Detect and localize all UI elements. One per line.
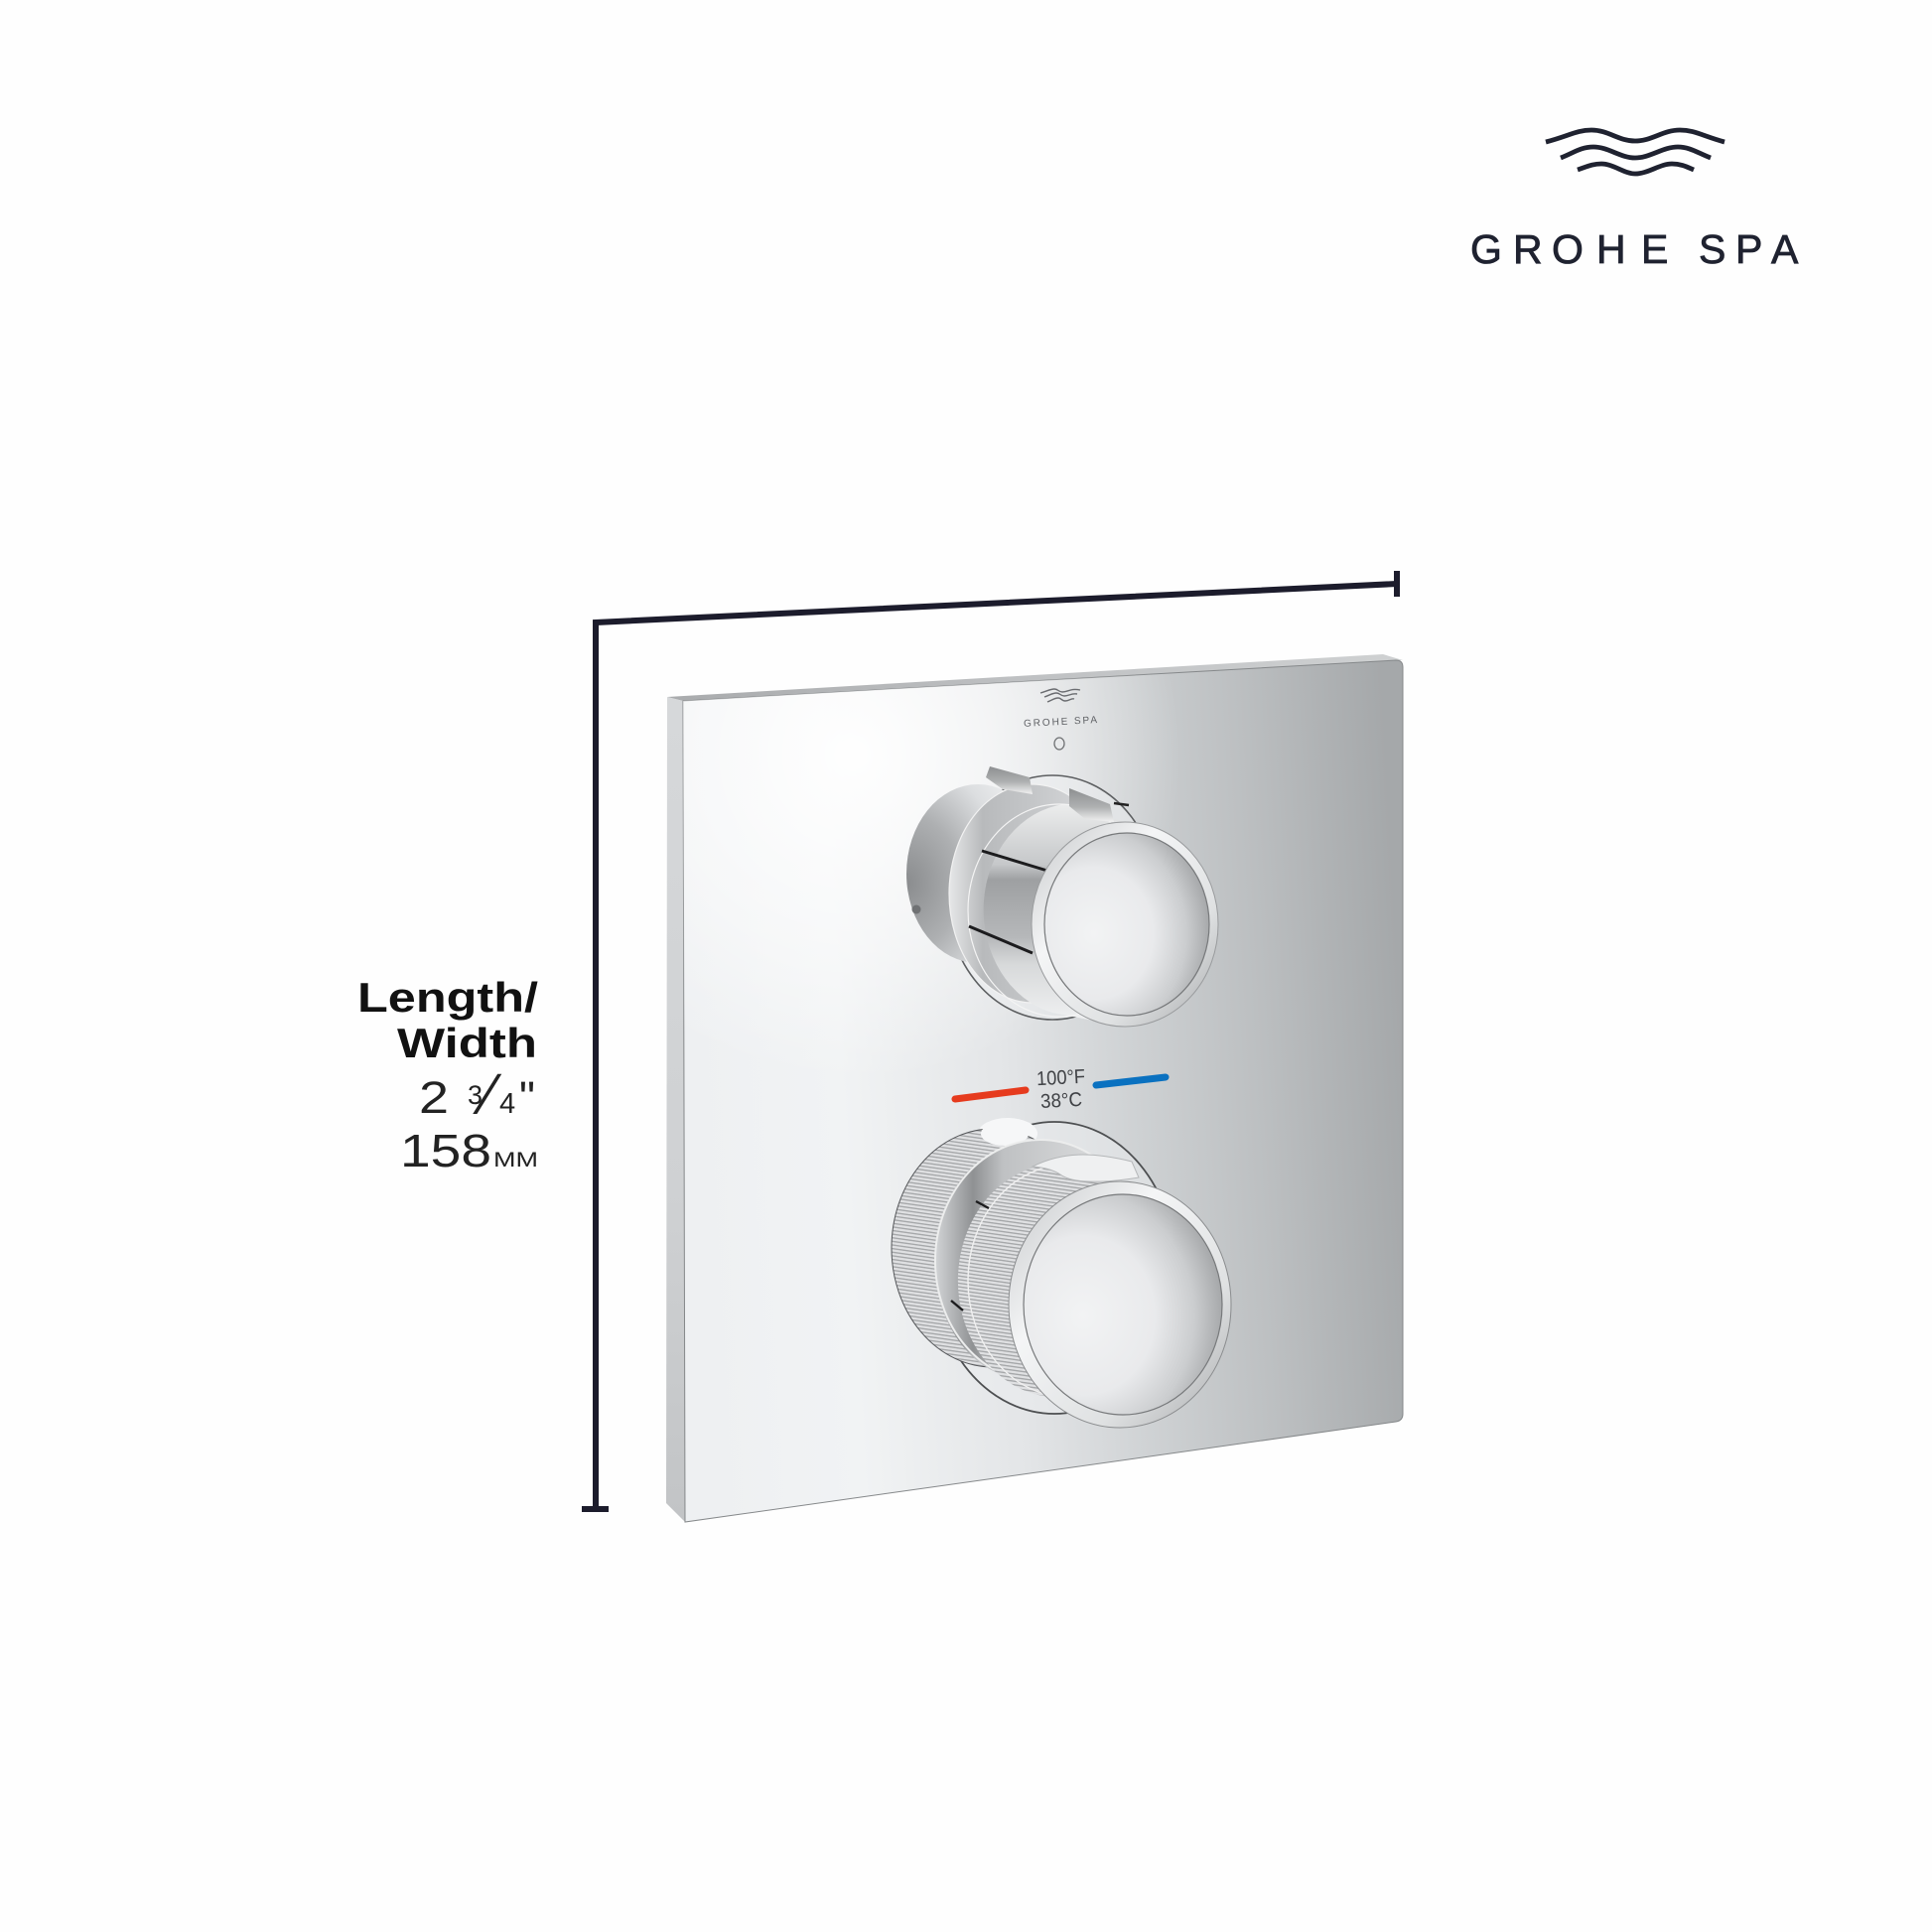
small wordmark: GROHE SPA bbox=[1024, 715, 1098, 730]
body reflection lines bbox=[969, 851, 1047, 953]
knob outer ring bbox=[1009, 1181, 1231, 1428]
panel: chrome trim plate bbox=[666, 654, 1403, 1522]
icon: three waves bbox=[1546, 130, 1725, 174]
plate brand mark bbox=[1024, 689, 1098, 750]
temperature celsius: 38°C bbox=[1040, 1089, 1083, 1113]
value: inches: 2 bbox=[419, 1072, 449, 1123]
knob face bbox=[1024, 1194, 1222, 1415]
lever dark tip bbox=[1114, 803, 1129, 805]
bottom end tick bbox=[582, 1506, 609, 1512]
plate front face bbox=[683, 660, 1403, 1522]
body highlight rim bbox=[968, 804, 1151, 1017]
knob face bbox=[1044, 833, 1209, 1016]
value: inches bbox=[419, 1062, 535, 1127]
lever rear bbox=[986, 766, 1033, 794]
rear cylinder bbox=[906, 784, 1049, 963]
dimension bracket bbox=[582, 571, 1397, 1509]
value: inches: 3 bbox=[468, 1080, 483, 1110]
front lever bbox=[1033, 1155, 1139, 1181]
value: millimetres: MM bbox=[493, 1149, 538, 1172]
value: inches: ⁄ bbox=[473, 1062, 502, 1127]
indicator circle bbox=[1054, 738, 1064, 750]
blind dot bbox=[911, 905, 921, 913]
upper thermostat knob bbox=[906, 766, 1218, 1027]
rear lever cap bbox=[981, 1122, 1029, 1146]
value: inches: 4 bbox=[499, 1088, 515, 1120]
dimension label bbox=[357, 974, 538, 1176]
logo wordmark: GROHE SPA bbox=[1470, 226, 1799, 272]
lever front bbox=[1069, 788, 1114, 822]
band reflections bbox=[951, 1201, 989, 1311]
knob outer ring bbox=[1032, 822, 1218, 1027]
front knurled ring bbox=[958, 1165, 1120, 1428]
temperature indicator bbox=[955, 1066, 1166, 1113]
label: Length/ Width: Length/ bbox=[357, 974, 538, 1021]
dimension label: Width bbox=[397, 1020, 537, 1066]
main body bbox=[984, 804, 1125, 1027]
logo: GROHE SPA bbox=[1470, 130, 1799, 272]
rear lever bbox=[978, 1118, 1037, 1150]
temperature fahrenheit: 100°F bbox=[1036, 1066, 1086, 1090]
value: inches: " bbox=[519, 1072, 535, 1123]
value: millimetres: 158 bbox=[400, 1125, 491, 1176]
lower thermostat knob bbox=[892, 1118, 1231, 1428]
small waves bbox=[1040, 689, 1080, 702]
top dimension line bbox=[596, 584, 1397, 1509]
plate top bevel bbox=[667, 654, 1403, 701]
chrome band rim bbox=[935, 1140, 1146, 1382]
wall rosette bbox=[933, 1122, 1175, 1414]
cold bar bbox=[1096, 1077, 1166, 1085]
right end tick bbox=[1394, 571, 1400, 597]
rear knurled ring bbox=[892, 1129, 1094, 1367]
wall rosette bbox=[947, 775, 1158, 1020]
hot bar bbox=[955, 1090, 1026, 1099]
value: millimetres bbox=[400, 1125, 538, 1176]
plate left side bbox=[666, 697, 685, 1522]
plate highlight bbox=[683, 660, 1403, 1522]
spacer ring bbox=[949, 784, 1116, 1003]
chrome band bbox=[935, 1145, 1067, 1396]
